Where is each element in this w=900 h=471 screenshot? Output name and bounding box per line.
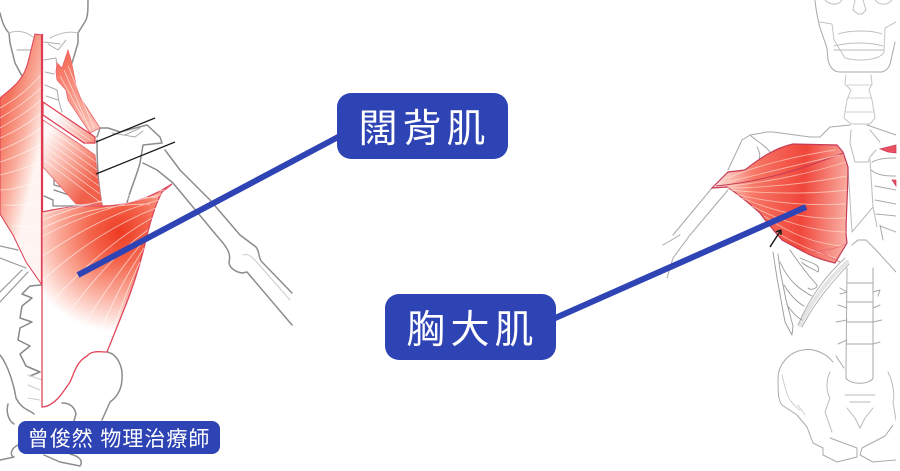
lumbar spine [18,285,41,376]
lower left ribs [0,246,28,302]
rib cage left [773,250,819,335]
scapula [97,125,162,203]
clavicular head divider [716,153,843,186]
label: 胸大肌 [385,294,556,360]
muscle: levator scapulae [56,50,100,133]
connector line: latissimus [78,136,340,275]
pelvis [102,352,122,420]
rib cage right [871,158,896,240]
skull and jaw [815,0,895,72]
label: 闊背肌 [337,93,508,159]
pubic bone right [860,425,896,462]
muscle: latissimus dorsi [42,184,172,407]
connector line: pectoralis [553,207,806,319]
cervical spine [844,75,875,124]
thoracic ribs [44,168,85,206]
muscle: pectoralis major [712,144,848,263]
muscle: rhomboid major [43,120,102,205]
black pointer arrow on pectoralis [770,230,781,247]
sacrum [825,372,896,432]
lumbar spine [836,268,882,383]
humerus [663,188,728,278]
clavicle and shoulder [750,125,896,137]
right-side small muscle fragment [880,145,896,186]
black pointer lines on scapula [96,118,175,174]
skull [0,0,88,78]
trapezius midline [41,34,43,285]
cervical spine [44,42,62,112]
label: 闊背肌: 闊背肌 [358,108,490,151]
humerus and forearm [165,150,292,293]
left skeleton: back view [0,0,292,466]
ilium left [778,350,857,462]
muscle: rhomboid minor [43,102,95,143]
credit badge [18,421,220,454]
sternum [848,160,877,232]
muscle: trapezius [0,34,42,285]
right skeleton: front view [663,0,896,462]
label: 胸大肌: 胸大肌 [406,309,538,352]
credit badge: 曾俊然 物理治療師 [28,428,210,450]
